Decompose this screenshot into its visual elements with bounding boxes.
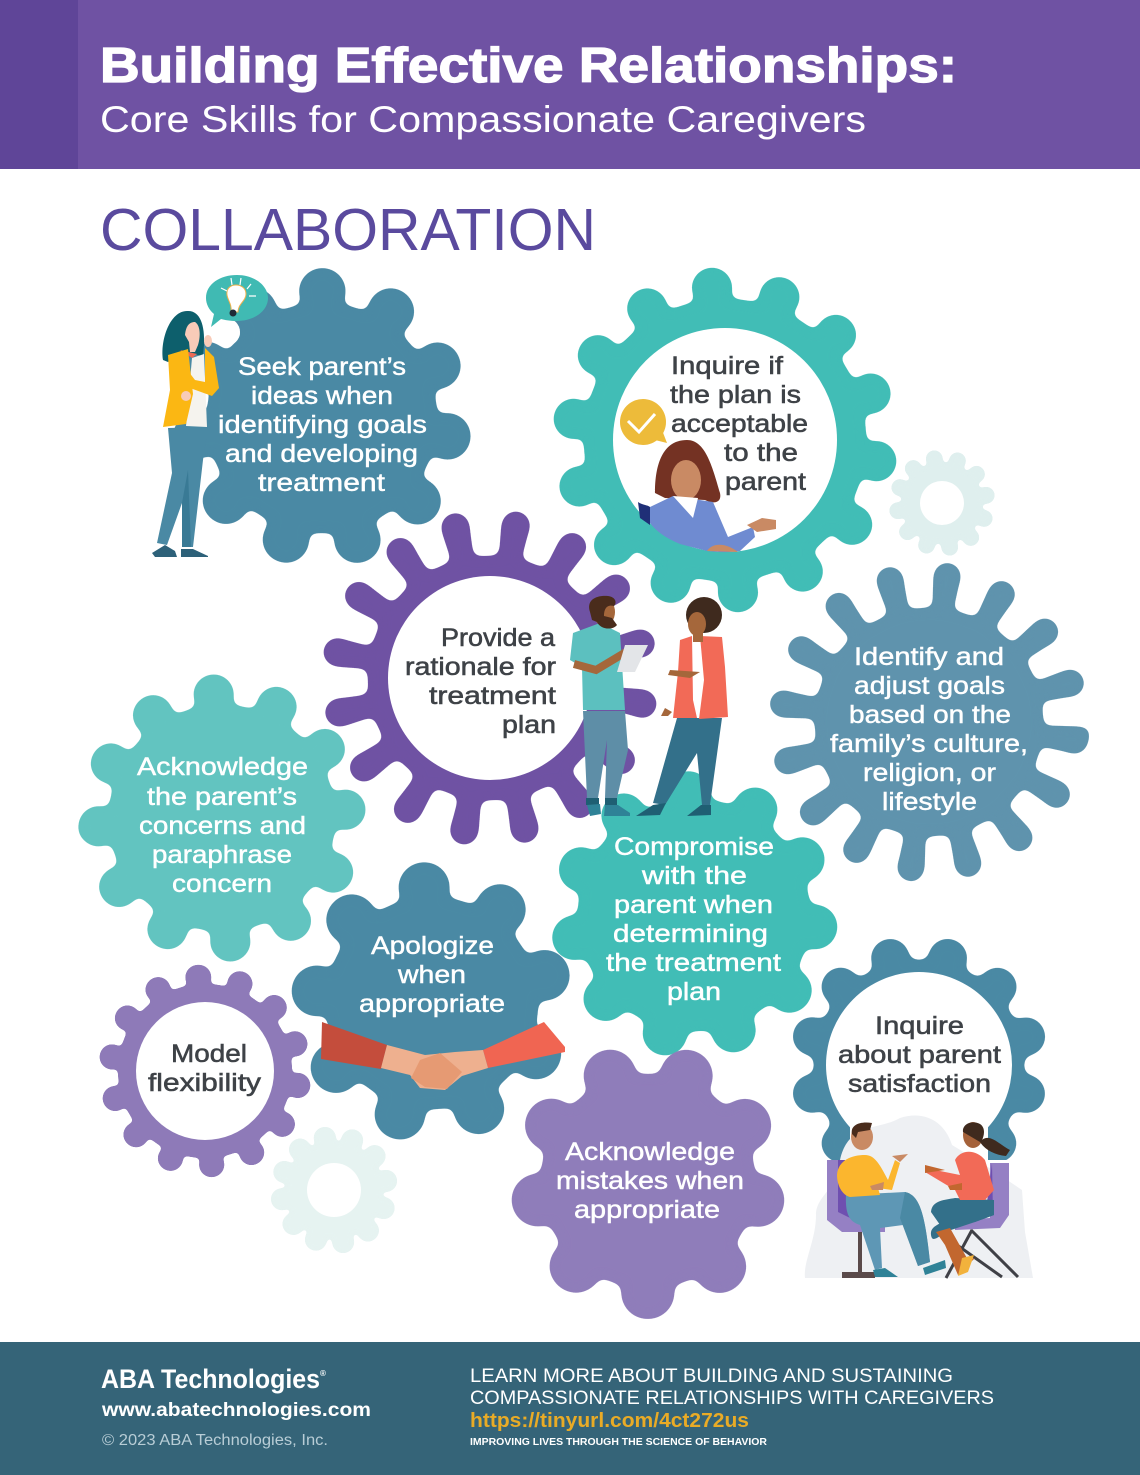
text: seek: treatment bbox=[258, 469, 385, 497]
icon: woman thinking with lightbulb bbox=[152, 275, 268, 557]
title: Building Effective Relationships: bbox=[100, 39, 957, 93]
panel: identify and adjust goals bbox=[765, 558, 1093, 886]
text: compromise: with the bbox=[641, 862, 747, 890]
text: compromise: the treatment bbox=[606, 949, 781, 977]
panel: compromise with parent bbox=[527, 748, 861, 1082]
website: www.abatechnologies.com bbox=[101, 1400, 371, 1421]
text: model bbox=[148, 1040, 262, 1097]
text: identify: religion, or bbox=[863, 759, 996, 787]
panel: acknowledge parent's concerns bbox=[90, 686, 354, 950]
text: inquire if: to the bbox=[724, 439, 798, 467]
text: apologize: when bbox=[397, 961, 466, 989]
icon: two people seated talking bbox=[805, 1116, 1033, 1278]
text: acknowledge concerns: concern bbox=[172, 870, 272, 898]
text: seek: ideas when bbox=[251, 382, 393, 410]
text: identify: family’s culture, bbox=[830, 730, 1028, 758]
learn more text: LEARN MORE ABOUT BUILDING AND SUSTAINING bbox=[470, 1365, 953, 1387]
text: inquire if: acceptable bbox=[671, 410, 808, 438]
text: acknowledge concerns bbox=[137, 753, 308, 898]
logo: ABA Technologies bbox=[101, 1364, 320, 1394]
text: provide: Provide a bbox=[441, 624, 555, 652]
text: provide: treatment bbox=[429, 682, 556, 710]
text: inquire if: Inquire if bbox=[671, 352, 783, 380]
text: compromise: determining bbox=[613, 920, 768, 948]
text: model: Model bbox=[171, 1040, 247, 1068]
text: provide: plan bbox=[502, 711, 556, 739]
icon: speech bubble with bulb bbox=[206, 275, 268, 327]
text: provide: rationale for bbox=[405, 653, 556, 681]
icon: man and woman talking bbox=[570, 596, 728, 816]
panel: model flexibility bbox=[105, 971, 305, 1171]
subtitle: Core Skills for Compassionate Caregivers bbox=[100, 99, 866, 140]
panel: acknowledge mistakes bbox=[536, 1069, 760, 1293]
tagline: IMPROVING LIVES THROUGH THE SCIENCE OF BEHAVIOR bbox=[470, 1437, 768, 1448]
text: apologize: Apologize bbox=[371, 932, 494, 960]
text: acknowledge concerns: concerns and bbox=[139, 812, 306, 840]
footer band bbox=[0, 1342, 1140, 1475]
learn more text bbox=[470, 1365, 994, 1409]
icon: woman in blue sweater bbox=[638, 440, 776, 552]
text: identify: based on the bbox=[849, 701, 1011, 729]
icon: handshake bbox=[321, 1022, 565, 1090]
panel: apologize when appropriate bbox=[308, 879, 565, 1127]
text: inquire about bbox=[838, 1012, 1001, 1098]
text: compromise: plan bbox=[667, 978, 721, 1006]
text: mistakes: mistakes when bbox=[556, 1167, 744, 1195]
icon: small pale gear left bbox=[273, 1129, 395, 1251]
text: inquire if: parent bbox=[725, 468, 806, 496]
text: identify: lifestyle bbox=[882, 788, 977, 816]
text: acknowledge concerns: Acknowledge bbox=[137, 753, 308, 781]
text: seek bbox=[218, 353, 427, 497]
text: inquire about: Inquire bbox=[875, 1012, 964, 1040]
text: compromise: parent when bbox=[614, 891, 773, 919]
text: identify bbox=[830, 643, 1028, 816]
text: identify: adjust goals bbox=[854, 672, 1005, 700]
header band bbox=[0, 0, 1140, 169]
text: inquire if bbox=[670, 352, 808, 496]
text: apologize: appropriate bbox=[359, 990, 505, 1018]
learn more text: COMPASSIONATE RELATIONSHIPS WITH CAREGIVERS bbox=[470, 1387, 994, 1409]
text: inquire about: satisfaction bbox=[848, 1070, 991, 1098]
logo: ® bbox=[320, 1369, 326, 1378]
text: provide bbox=[405, 624, 556, 739]
text: identify: Identify and bbox=[854, 643, 1004, 671]
text: inquire if: the plan is bbox=[670, 381, 801, 409]
icon: small pale gear right bbox=[890, 451, 994, 555]
text: seek: and developing bbox=[225, 440, 418, 468]
text: seek: Seek parent’s bbox=[238, 353, 406, 381]
panel: inquire about satisfaction bbox=[783, 929, 1060, 1220]
text: acknowledge concerns: paraphrase bbox=[152, 841, 292, 869]
text: apologize bbox=[359, 932, 505, 1018]
text: mistakes bbox=[556, 1138, 744, 1224]
text: mistakes: Acknowledge bbox=[565, 1138, 735, 1166]
copyright: © 2023 ABA Technologies, Inc. bbox=[102, 1432, 328, 1449]
text: compromise: Compromise bbox=[614, 833, 774, 861]
panel: inquire if plan is acceptable bbox=[559, 274, 891, 606]
text: inquire about: about parent bbox=[838, 1041, 1001, 1069]
text: model: flexibility bbox=[148, 1069, 262, 1097]
section heading: COLLABORATION bbox=[100, 197, 596, 263]
text: seek: identifying goals bbox=[218, 411, 427, 439]
text: acknowledge concerns: the parent’s bbox=[147, 783, 297, 811]
text: mistakes: appropriate bbox=[574, 1196, 720, 1224]
panel: provide a rationale bbox=[312, 500, 668, 856]
link: https://tinyurl.com/4ct272us bbox=[470, 1410, 749, 1432]
icon: check speech bubble bbox=[620, 399, 667, 445]
text: compromise bbox=[606, 833, 781, 1006]
panel: seek parent's ideas bbox=[195, 291, 449, 545]
